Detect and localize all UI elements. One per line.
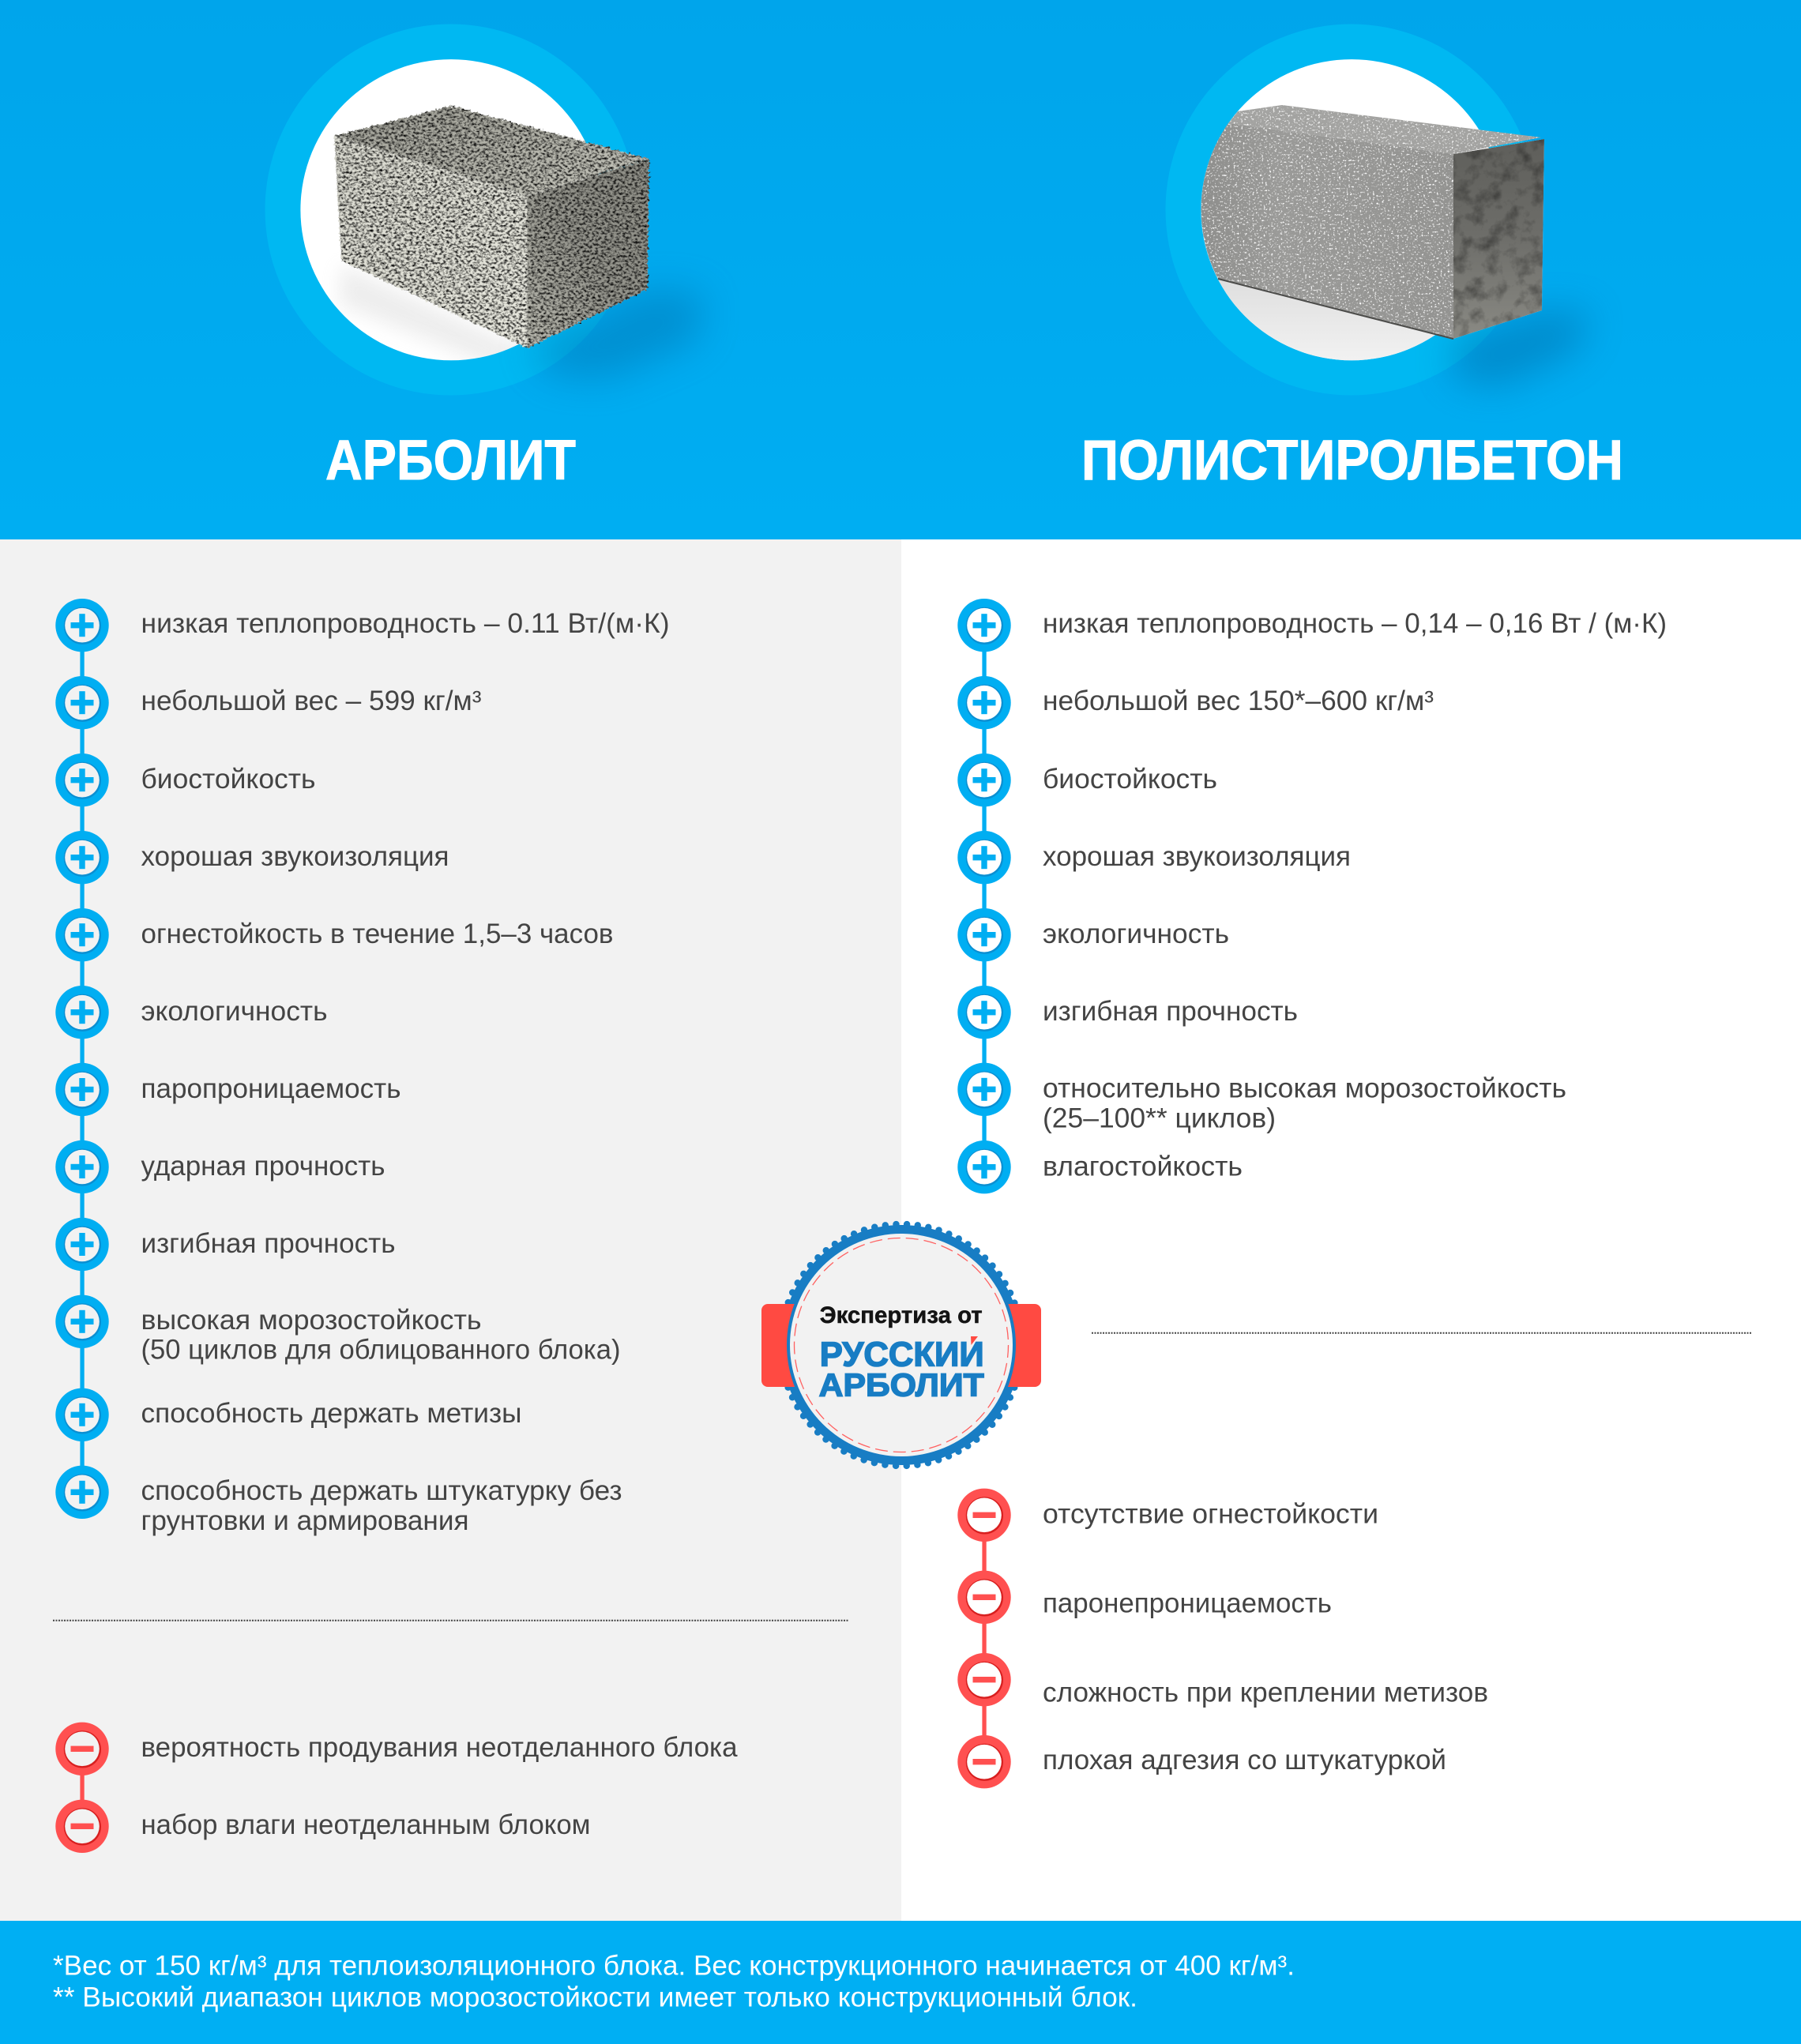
- item: low weight: [55, 676, 482, 729]
- footnotes: *Вес от 150 кг/м³ для теплоизоляционного блока. Вес конструкционного начинается от 400 кг/м³.: [53, 1951, 1295, 1982]
- item: moisture resistance: влагостойкость: [1043, 1152, 1243, 1182]
- item: frost resistance: высокая морозостойкость: [141, 1305, 482, 1336]
- item: eco friendliness: экологичность: [141, 996, 327, 1027]
- item: biostability: [55, 753, 316, 806]
- item: blow-through risk: вероятность продувания неотделанного блока: [141, 1732, 738, 1763]
- image: arbolite block in circle: [265, 24, 703, 395]
- footnotes: [53, 1951, 1295, 2013]
- item: sound insulation: [55, 831, 449, 884]
- item: difficult fastening: [957, 1653, 1488, 1708]
- item: holds fasteners: [55, 1388, 522, 1441]
- item: eco friendliness: [957, 908, 1229, 961]
- item: blow-through risk: [55, 1723, 738, 1775]
- title: arbolite: АРБОЛИТ: [325, 430, 576, 492]
- badge logo: red accent: [971, 1336, 978, 1345]
- item: vapour permeability: паропроницаемость: [141, 1073, 401, 1104]
- item: low thermal conductivity: низкая теплопроводность – 0,14 – 0,16 Вт / (м·К): [1043, 608, 1667, 639]
- header band: [0, 0, 1801, 539]
- item: frost resistance: [55, 1295, 621, 1366]
- item: low weight: небольшой вес 150*–600 кг/м³: [1043, 686, 1434, 716]
- item: sound insulation: хорошая звукоизоляция: [141, 841, 449, 872]
- item: holds plaster: способность держать штукатурку без: [141, 1475, 622, 1506]
- item: fire resistance: огнестойкость в течение 1,5–3 часов: [141, 919, 613, 949]
- item: bending strength: изгибная прочность: [1043, 996, 1298, 1027]
- item: low weight: [957, 676, 1434, 729]
- item: no fire resistance: отсутствие огнестойкости: [1043, 1499, 1378, 1529]
- item: biostability: биостойкость: [141, 764, 316, 795]
- item: moisture gain: [55, 1800, 591, 1853]
- badge: expertise seal: [761, 1224, 1041, 1466]
- item: holds plaster: [55, 1466, 622, 1536]
- panel: left material column background: [0, 539, 901, 1921]
- item: difficult fastening: сложность при креплении метизов: [1043, 1677, 1488, 1708]
- item: biostability: биостойкость: [1043, 764, 1217, 795]
- item: moisture resistance: [957, 1140, 1243, 1193]
- list: polystyrene concrete disadvantages: [957, 1489, 1488, 1788]
- list: arbolite advantages: [55, 599, 670, 1536]
- item: poor plaster adhesion: плохая адгезия со штукатуркой: [1043, 1745, 1446, 1775]
- list: polystyrene concrete advantages: [957, 599, 1667, 1193]
- badge logo: first line: РУССКИЙ: [820, 1333, 984, 1373]
- item: eco friendliness: [55, 986, 328, 1039]
- item: vapour permeability: [55, 1063, 401, 1116]
- item: vapour tight: паронепроницаемость: [1043, 1587, 1332, 1618]
- title: polystyrene concrete: ПОЛИСТИРОЛБЕТОН: [1081, 430, 1623, 492]
- item: poor plaster adhesion: [957, 1735, 1446, 1788]
- item: impact strength: [55, 1140, 385, 1193]
- item: holds fasteners: способность держать метизы: [141, 1398, 521, 1429]
- item: bending strength: изгибная прочность: [141, 1228, 395, 1259]
- item: bending strength: [957, 986, 1298, 1039]
- item: frost resistance: (50 циклов для облицованного блока): [141, 1335, 621, 1366]
- item: bending strength: [55, 1218, 396, 1271]
- timeline connector: left cons: [80, 1749, 85, 1826]
- item: low thermal conductivity: [957, 599, 1667, 652]
- timeline connector: right cons: [982, 1515, 987, 1762]
- item: moisture gain: набор влаги неотделанным блоком: [141, 1809, 591, 1840]
- badge logo: second line: АРБОЛИТ: [819, 1366, 984, 1403]
- image: polystyrene concrete block in circle: [1166, 24, 1592, 395]
- item: frost resistance: [957, 1063, 1566, 1133]
- timeline connector: left pros: [80, 626, 85, 1492]
- list: arbolite disadvantages: [55, 1723, 738, 1853]
- item: sound insulation: хорошая звукоизоляция: [1043, 841, 1351, 872]
- item: low weight: небольшой вес – 599 кг/м³: [141, 686, 482, 716]
- item: frost resistance: (25–100** циклов): [1043, 1103, 1276, 1133]
- item: fire resistance: [55, 908, 614, 961]
- item: vapour tight: [957, 1571, 1332, 1624]
- item: biostability: [957, 753, 1217, 806]
- panel: right material column background: [901, 539, 1801, 1921]
- footnotes: ** Высокий диапазон циклов морозостойкости имеет только конструкционный блок.: [53, 1982, 1137, 2013]
- item: low thermal conductivity: низкая теплопроводность – 0.11 Вт/(м·К): [141, 608, 670, 639]
- item: no fire resistance: [957, 1489, 1378, 1542]
- item: sound insulation: [957, 831, 1351, 884]
- item: low thermal conductivity: [55, 599, 670, 652]
- item: holds plaster: грунтовки и армирования: [141, 1505, 469, 1536]
- badge text: expertise from: Экспертиза от: [820, 1302, 983, 1328]
- item: frost resistance: относительно высокая морозостойкость: [1043, 1073, 1566, 1104]
- item: impact strength: ударная прочность: [141, 1151, 385, 1182]
- timeline connector: right pros: [982, 626, 987, 1167]
- item: eco friendliness: экологичность: [1043, 919, 1229, 949]
- footer band: [0, 1921, 1801, 2044]
